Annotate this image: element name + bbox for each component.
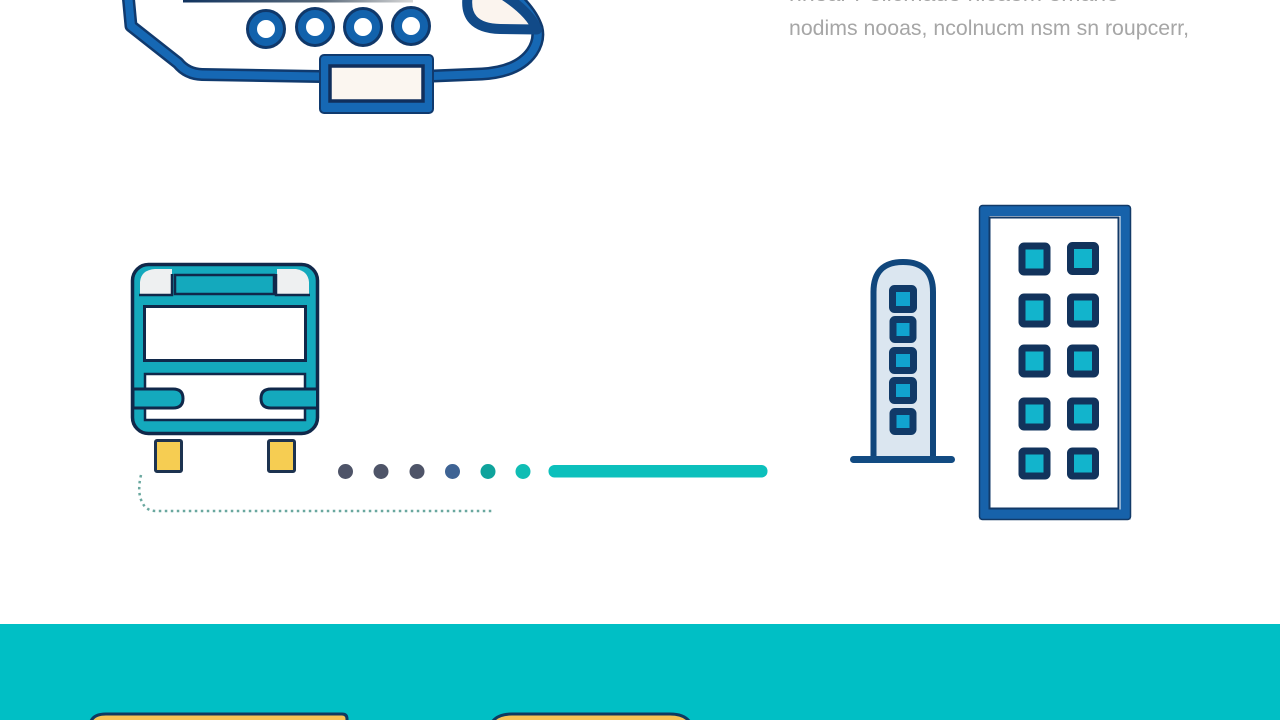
tower body — [874, 262, 933, 459]
plane cargo door — [320, 55, 433, 113]
building windows — [1022, 246, 1096, 476]
icon: bus — [132, 264, 318, 472]
plane window strip — [183, 0, 413, 2]
progress dots — [338, 464, 530, 479]
yellow card left — [90, 714, 347, 720]
plane engine rings — [252, 12, 424, 42]
bus destination sign — [175, 275, 274, 294]
bottom teal band — [0, 624, 1280, 720]
tower base — [850, 456, 955, 463]
building frame — [984, 211, 1126, 514]
text block: caption — [789, 0, 1189, 40]
bus windshield — [144, 306, 306, 360]
bus lower panel — [145, 374, 305, 420]
tower windows — [892, 288, 914, 432]
bus left grille — [133, 389, 183, 408]
bus body — [132, 264, 318, 434]
dotted route line — [139, 475, 494, 511]
icon: tall building — [980, 206, 1130, 520]
progress bar — [548, 465, 768, 478]
icon: narrow tower — [850, 262, 955, 463]
bus right wheel — [268, 440, 294, 472]
icon: airplane — [128, 0, 538, 113]
yellow card right — [491, 714, 691, 720]
plane fuselage outline — [128, 0, 538, 76]
text block: caption: nodims nooas, ncolnucm nsm sn roupcerr, — [789, 17, 1189, 40]
plane cockpit window — [467, 0, 537, 30]
bus right grille — [261, 389, 317, 408]
bus headlights — [139, 269, 310, 295]
bus left wheel — [156, 440, 182, 472]
